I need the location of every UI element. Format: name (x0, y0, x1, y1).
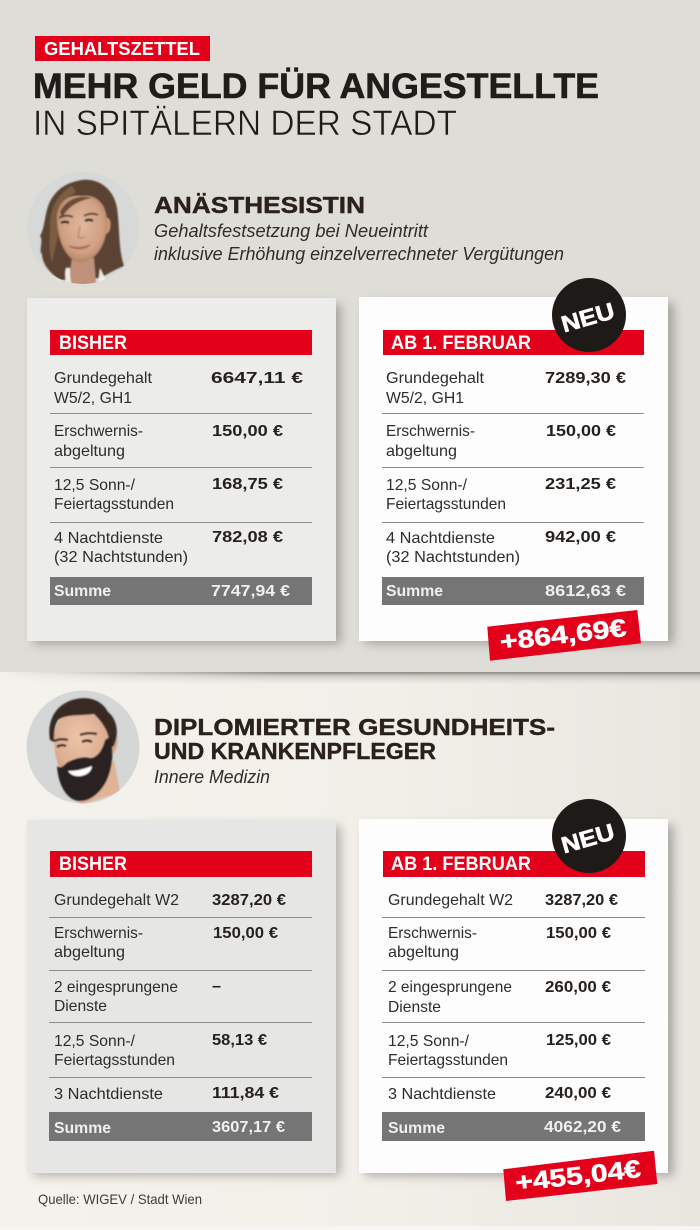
row: Nachtdienste: 4 Nachtdienste (54, 530, 163, 547)
title: MEHR GELD FÜR ANGESTELLTE (33, 67, 599, 106)
background: bottom section (0, 672, 700, 1230)
row: Sonn- und Feiertagsstunden (54, 1032, 267, 1069)
row: Sonn- und Feiertagsstunden: 58,13 € (212, 1032, 267, 1049)
row: Sonn- und Feiertagsstunden (54, 476, 283, 513)
row: eingesprungene Dienste: – (212, 978, 221, 995)
row: Summe (382, 577, 644, 605)
row: Summe (382, 1112, 645, 1141)
subheading: anesthetist description (154, 221, 564, 264)
heading: Diplomierter Gesundheits- und Krankenpfleger: DIPLOMIERTER GESUNDHEITS- (154, 714, 555, 740)
row: Erschwernisabgeltung (388, 925, 611, 961)
row: Sonn- und Feiertagsstunden: 12,5 Sonn-/ (388, 1033, 470, 1050)
row: Summe (50, 577, 312, 605)
row: Grundgehalt: 7289,30 € (545, 370, 626, 387)
row: Erschwernisabgeltung: 150,00 € (213, 925, 278, 942)
row: Nachtdienste: (32 Nachtstunden) (386, 549, 520, 566)
header bar: Bisher: BISHER (59, 854, 127, 875)
row: Nachtdienste (388, 1085, 611, 1103)
row: Nachtdienste: (32 Nachtstunden) (54, 549, 188, 566)
row: Summe: 8612,63 € (545, 583, 626, 600)
row: Grundgehalt: Grundegehalt (386, 370, 485, 387)
tag: Gehaltszettel: GEHALTSZETTEL (44, 39, 200, 59)
row: Sonn- und Feiertagsstunden: Feiertagsstunden (54, 496, 174, 513)
row: Summe (49, 1112, 312, 1141)
row: Grundgehalt: Grundegehalt W2 (54, 892, 179, 909)
row: Grundgehalt: 6647,11 € (211, 370, 303, 387)
row: Erschwernisabgeltung: abgeltung (386, 443, 457, 460)
row: Erschwernisabgeltung: abgeltung (54, 443, 125, 460)
row: Nachtdienste: 942,00 € (545, 529, 616, 546)
heading: Anästhesistin: ANÄSTHESISTIN (154, 192, 365, 218)
row: Erschwernisabgeltung: 150,00 € (546, 925, 611, 942)
header bar: Ab 1. Februar: AB 1. FEBRUAR (391, 333, 531, 354)
badge: Neu: NEU (558, 818, 617, 858)
row: Nachtdienste: 782,08 € (212, 529, 283, 546)
row: eingesprungene Dienste: Dienste (54, 998, 107, 1015)
icon: portrait of anesthetist (27, 172, 139, 286)
header bar: Bisher: BISHER (59, 333, 127, 354)
row: Erschwernisabgeltung: 150,00 € (212, 423, 283, 440)
panel: anesthetist from February (359, 278, 674, 661)
row: Erschwernisabgeltung: Erschwernis- (54, 423, 143, 440)
badge: increase 864,69: +864,69€ (498, 614, 628, 656)
row: Erschwernisabgeltung: Erschwernis- (386, 423, 475, 440)
row: Grundgehalt (386, 370, 626, 407)
row: Grundgehalt (54, 370, 303, 407)
header bar: Bisher (50, 851, 312, 877)
row: Sonn- und Feiertagsstunden: Feiertagsstunden (388, 1052, 508, 1069)
row: eingesprungene Dienste (388, 979, 611, 1016)
row: Summe: Summe (388, 1120, 445, 1137)
row: Nachtdienste: 240,00 € (545, 1085, 611, 1102)
row: Grundgehalt: 3287,20 € (545, 892, 618, 909)
header bar: Ab 1. Februar (383, 851, 645, 877)
row: Erschwernisabgeltung (54, 925, 278, 961)
row: Sonn- und Feiertagsstunden: 12,5 Sonn-/ (386, 477, 468, 494)
header bar: Ab 1. Februar (383, 330, 644, 355)
row: Nachtdienste: 111,84 € (212, 1085, 279, 1102)
title: IN SPITÄLERN DER STADT (33, 104, 457, 143)
panel: anesthetist before (27, 298, 341, 644)
row: Summe: Summe (54, 583, 111, 600)
row: eingesprungene Dienste (54, 978, 221, 1015)
row: Sonn- und Feiertagsstunden: Feiertagsstunden (54, 1052, 175, 1069)
row: Erschwernisabgeltung: Erschwernis- (388, 925, 477, 942)
row: Grundgehalt: W5/2, GH1 (54, 390, 132, 407)
row: Nachtdienste (54, 1085, 279, 1103)
row: Erschwernisabgeltung: abgeltung (54, 944, 125, 961)
row: Nachtdienste: 3 Nachtdienste (54, 1086, 163, 1103)
header bar: Bisher (50, 330, 312, 355)
row: Summe: 7747,94 € (211, 583, 290, 600)
header bar: Ab 1. Februar: AB 1. FEBRUAR (391, 854, 531, 875)
row: Sonn- und Feiertagsstunden: 125,00 € (546, 1032, 611, 1049)
badge: increase 864,69 (487, 610, 641, 661)
row: eingesprungene Dienste: Dienste (388, 999, 441, 1016)
row: Sonn- und Feiertagsstunden: 168,75 € (212, 476, 283, 493)
row: eingesprungene Dienste: 260,00 € (545, 979, 611, 996)
panel: nurse from February (359, 799, 674, 1201)
row: eingesprungene Dienste: 2 eingesprungene (54, 979, 178, 996)
row: Erschwernisabgeltung: 150,00 € (546, 423, 616, 440)
badge: Neu (552, 278, 626, 352)
title (33, 67, 599, 143)
panel: nurse before (27, 820, 341, 1176)
subheading: Innere Medizin: Innere Medizin (154, 767, 270, 787)
row: Erschwernisabgeltung (386, 423, 616, 460)
subheading: anesthetist description: inklusive Erhöhung einzelverrechneter Vergütungen (154, 244, 564, 264)
row: Nachtdienste: 3 Nachtdienste (388, 1086, 496, 1103)
row: Summe: 4062,20 € (544, 1119, 621, 1136)
tag: Gehaltszettel (35, 36, 210, 61)
icon: portrait of nurse (26, 690, 140, 806)
background: top section (0, 0, 700, 672)
row: Grundgehalt: W5/2, GH1 (386, 390, 464, 407)
row: Grundgehalt: Grundegehalt (54, 370, 153, 387)
row: Grundgehalt: 3287,20 € (212, 892, 286, 909)
row: Erschwernisabgeltung: Erschwernis- (54, 925, 143, 942)
source note: Quelle: WIGEV / Stadt Wien (38, 1191, 202, 1207)
row: Sonn- und Feiertagsstunden (386, 476, 616, 513)
badge: Neu: NEU (558, 297, 617, 337)
heading: Diplomierter Gesundheits- und Krankenpfleger: UND KRANKENPFLEGER (154, 738, 436, 764)
row: Summe: Summe (386, 583, 443, 600)
row: Summe: 3607,17 € (212, 1119, 285, 1136)
row: Nachtdienste: 4 Nachtdienste (386, 530, 495, 547)
row: eingesprungene Dienste: 2 eingesprungene (388, 979, 512, 996)
row: Nachtdienste (54, 529, 283, 566)
heading: Diplomierter Gesundheits- und Krankenpfleger (154, 714, 555, 764)
row: Grundgehalt (388, 892, 618, 909)
row: Sonn- und Feiertagsstunden: Feiertagsstunden (386, 496, 506, 513)
row: Summe: Summe (54, 1120, 111, 1137)
row: Grundgehalt: Grundegehalt W2 (388, 892, 513, 909)
row: Sonn- und Feiertagsstunden: 12,5 Sonn-/ (54, 1033, 136, 1050)
row: Erschwernisabgeltung: abgeltung (388, 944, 459, 961)
badge: increase 455,04: +455,04€ (514, 1155, 642, 1197)
row: Erschwernisabgeltung (54, 423, 283, 460)
badge: Neu (552, 799, 626, 873)
badge: increase 455,04 (503, 1151, 657, 1201)
row: Sonn- und Feiertagsstunden: 231,25 € (545, 476, 616, 493)
row: Grundgehalt (54, 892, 286, 909)
row: Nachtdienste (386, 529, 616, 566)
row: Sonn- und Feiertagsstunden (388, 1032, 611, 1069)
subheading: anesthetist description: Gehaltsfestsetzung bei Neueintritt (154, 221, 429, 241)
row: Sonn- und Feiertagsstunden: 12,5 Sonn-/ (54, 477, 136, 494)
